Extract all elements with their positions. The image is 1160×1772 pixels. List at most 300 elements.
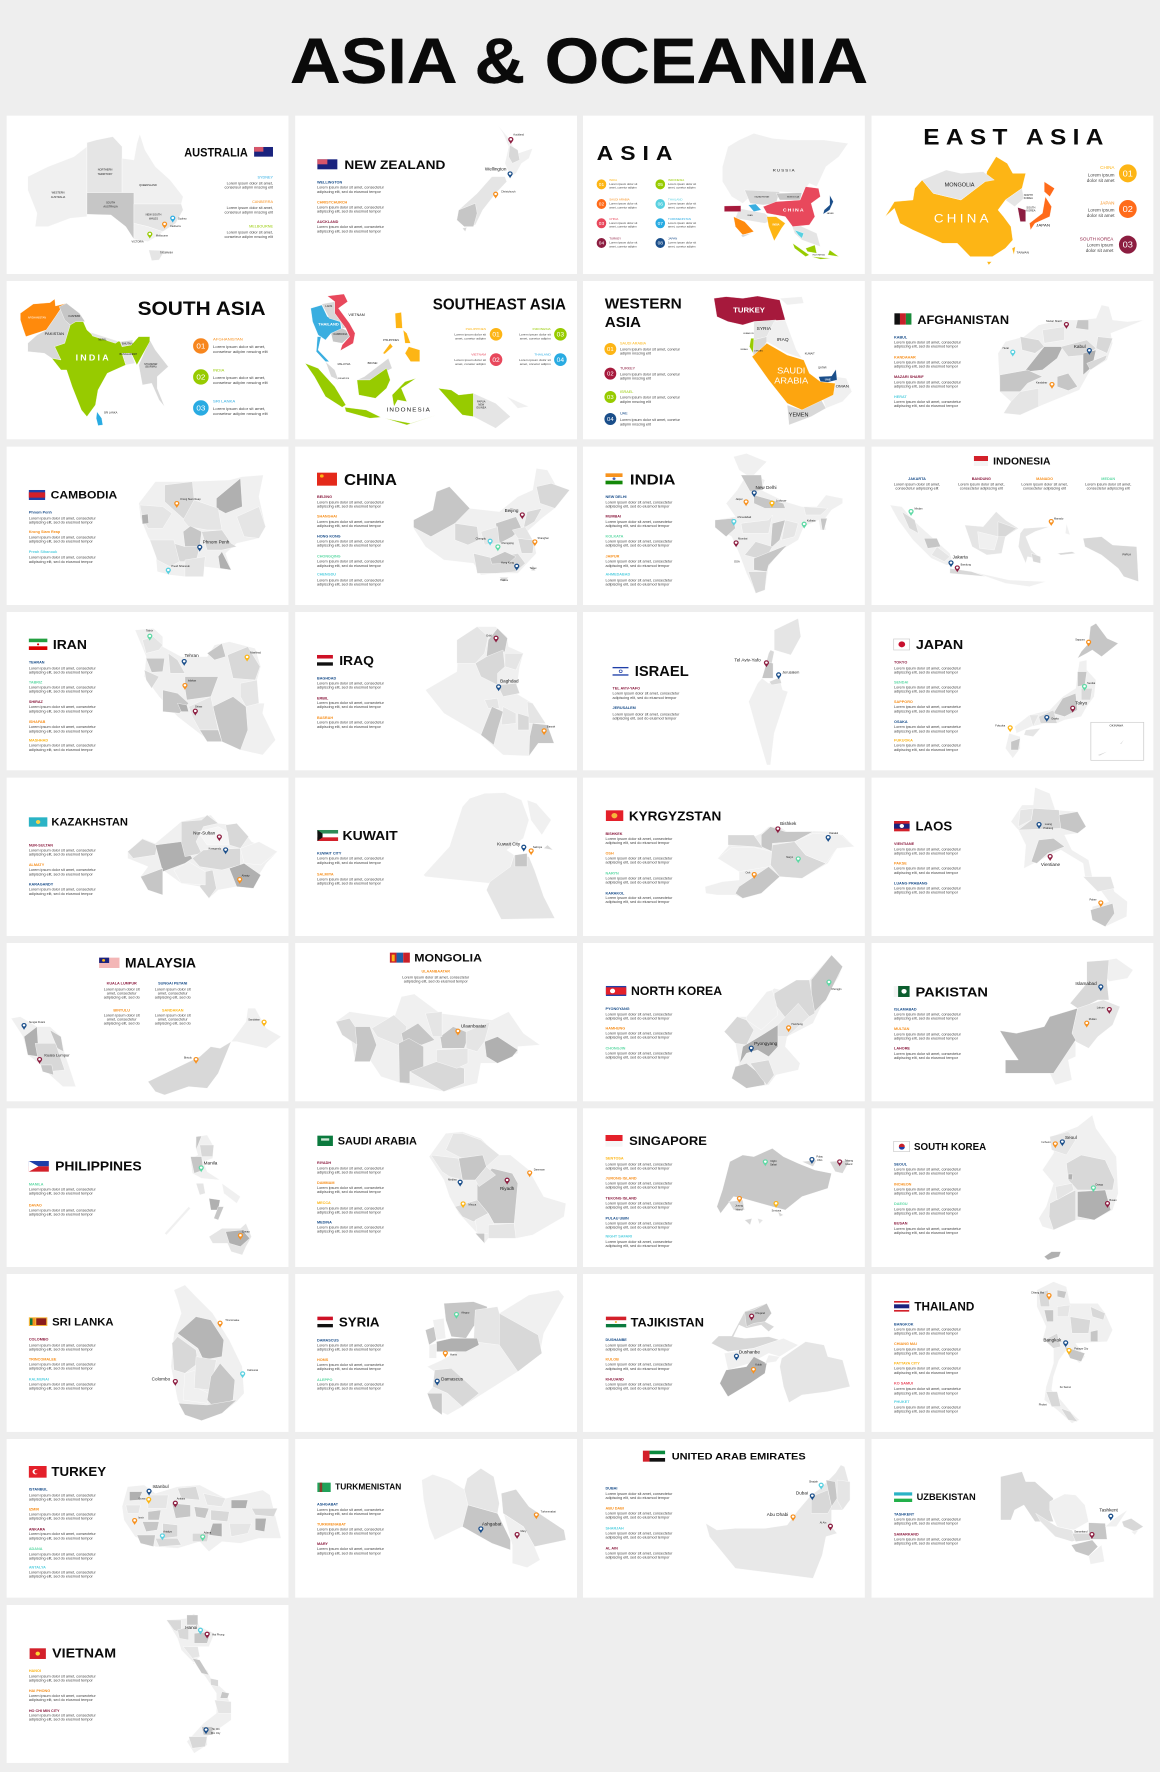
map: Southeast Asia: BRUNEI <box>368 362 378 365</box>
city list: Lorem ipsum dolor sit amet, consectetur <box>317 1206 385 1210</box>
city list: amet, consectetur <box>107 991 137 995</box>
panel: Uzbekistan <box>871 1439 1153 1598</box>
city list: ERBIL <box>317 696 329 700</box>
flag: Tajikistan <box>606 1317 626 1327</box>
map: Kazakhstan <box>128 815 277 898</box>
map: Asia: IRAN <box>748 214 753 217</box>
map: Australia: VICTORIA <box>132 240 144 243</box>
city list: Lorem ipsum dolor sit amet, consectetur <box>894 1537 962 1541</box>
city list: Lorem ipsum dolor sit amet, consectetur <box>317 1383 385 1387</box>
panel: East Asia <box>871 116 1153 274</box>
map: Israel <box>734 618 801 765</box>
numbered list: conseteur adipim nnscing elit <box>213 349 269 354</box>
city list: NEW DELHI <box>606 495 627 499</box>
map: Western Asia: ARABIA <box>774 376 808 385</box>
numbered list: 02 <box>1123 204 1133 214</box>
map: Kyrgyzstan <box>705 821 854 898</box>
heading: United Arab Emirates: UNITED ARAB EMIRATES <box>672 1452 806 1462</box>
city list <box>606 832 673 904</box>
city list: adipiscing elit, sed do eiusmod tempor <box>29 670 94 674</box>
city list: adipiscing elit, sed do eiusmod tempor <box>894 1017 959 1021</box>
map: Turkey: Istanbul <box>152 1484 169 1489</box>
city list: TABRIZ <box>29 680 43 684</box>
numbered list: adipim nnscing elit <box>620 400 651 404</box>
city list: Lorem ipsum dolor sit amet, consectetur <box>894 1207 962 1211</box>
city list: adipiscing elit, sed do eiusmod tempor <box>317 190 382 194</box>
city list: Lorem ipsum dolor sit amet, consectetur <box>606 1012 673 1016</box>
city list: Lorem ipsum dolor sit amet, consectetur <box>606 1512 673 1516</box>
map: Cambodia: Krong Siem Reap <box>180 498 201 501</box>
city list: adipiscing elit, sed do eiusmod tempor <box>29 1497 94 1501</box>
city list: Lorem ipsum dolor sit amet, consectetur <box>606 578 673 582</box>
city list: Lorem ipsum dolor sit amet, consectetur <box>894 341 962 345</box>
numbered list: Lorem ipsum dolor sit <box>609 241 638 245</box>
title: ASIA & OCEANIA <box>290 25 868 97</box>
numbered list: amet, conetur adipim <box>668 244 696 248</box>
flag: Philippines <box>29 1161 49 1172</box>
heading: Malaysia: MALAYSIA <box>125 956 197 971</box>
map: Israel: Jerusalem <box>782 670 799 674</box>
flag: Vietnam <box>30 1648 46 1659</box>
city list: adipiscing elit, sed do eiusmod tempor <box>606 1186 670 1190</box>
numbered list: 01 <box>492 332 500 339</box>
map: Kuwait: Kuwait City <box>497 842 521 847</box>
numbered list: INDIA <box>609 178 617 182</box>
numbered list: amet, conetur adipim <box>668 205 696 209</box>
city list: Lorem ipsum dolor sit amet, consectetur <box>29 556 97 560</box>
city list: adipiscing elit, sed do eiusmod tempor <box>29 729 94 733</box>
city list: JURONG ISLAND <box>606 1177 637 1181</box>
numbered list: 02 <box>599 202 605 207</box>
heading: Tajikistan: TAJIKISTAN <box>631 1315 704 1329</box>
heading: Southeast Asia: SOUTHEAST ASIA <box>433 296 566 313</box>
city list: MAZARI SHARIF <box>894 375 925 379</box>
map: Southeast Asia: PHILIPPINES <box>383 339 399 342</box>
heading: North Korea: NORTH KOREA <box>631 985 722 998</box>
city list: adipiscing elit, sed do eiusmod tempor <box>894 1036 959 1040</box>
city list: adipiscing elit, sed do eiusmod tempor <box>894 851 959 855</box>
numbered list <box>604 342 681 426</box>
map: Turkey: Izmir <box>138 1516 144 1519</box>
city list: Lorem ipsum dolor sit amet, consectetur <box>29 1571 97 1575</box>
city list: DAVAO <box>29 1204 42 1208</box>
city list: consectetur adipiscing elit <box>895 486 939 490</box>
city list: adipiscing elit, sed do eiusmod tempor <box>894 690 959 694</box>
city list: Lorem ipsum dolor sit amet, consectetur <box>613 713 680 717</box>
flag: Kuwait <box>317 830 338 841</box>
numbered list: UAE <box>620 412 628 416</box>
city list: Lorem ipsum dolor sit amet, <box>227 206 273 210</box>
city list: ISLAMABAD <box>894 1007 917 1011</box>
flag: Saudi Arabia <box>317 1136 333 1146</box>
map: Turkmenistan: Mary <box>521 1530 527 1533</box>
city list: Lorem ipsum dolor sit amet, consectetur <box>317 520 385 524</box>
panel: Saudi Arabia <box>295 1108 577 1267</box>
city list: Lorem ipsum dolor sit amet, consectetur <box>29 1343 97 1347</box>
city list: amet, consectetur <box>158 1017 189 1021</box>
map: South Korea: Busan <box>1109 1199 1117 1202</box>
map: Singapore: Safari <box>770 1164 777 1167</box>
city list: adipiscing elit, sed do eiusmod tempor <box>29 748 94 752</box>
city list: adipiscing elit, sed do eiusmod tempor <box>29 1517 94 1521</box>
numbered list: INDONESIA <box>668 178 684 182</box>
numbered list: Lorem ipsum <box>1087 243 1114 248</box>
city list: CHONGQING <box>317 554 341 558</box>
map: North Korea <box>724 955 843 1088</box>
panel: Afghanistan <box>871 281 1153 439</box>
numbered list: Lorem ipsum dolor sit <box>454 358 486 362</box>
city list: Lorem ipsum dolor sit amet, consectetur <box>606 857 673 861</box>
numbered list: 04 <box>607 417 614 423</box>
map: Turkmenistan: Ashgabat <box>482 1522 502 1526</box>
city list: adipiscing elit, sed do eiusmod tempor <box>606 505 670 509</box>
city list: adipiscing elit, sed do eiusmod tempor <box>606 1244 670 1248</box>
city list: SENDAI <box>894 680 908 684</box>
city list: Lorem ipsum dolor sit amet, consectetur <box>606 1383 673 1387</box>
city list: Lorem ipsum dolor sit amet, consectetur <box>894 1032 962 1036</box>
map: India: New Delhi <box>756 485 777 490</box>
city list: adipiscing elit, sed do eiusmod tempor <box>894 345 959 349</box>
heading: East Asia: EAST ASIA <box>923 124 1104 149</box>
city list <box>29 1488 97 1579</box>
city list: TEHRAN <box>29 660 45 664</box>
numbered list: Lorem ipsum dolor sit <box>668 202 696 206</box>
city list: Lorem ipsum dolor sit amet, consectetur <box>606 500 673 504</box>
city list: adipiscing elit, sed do <box>104 1021 140 1025</box>
map: Tajikistan: Khujand <box>755 1312 766 1315</box>
flag: Pakistan <box>894 986 910 997</box>
map: Singapore: Sentosa <box>772 1209 782 1212</box>
map: China: Hong Kong <box>501 562 515 565</box>
city list: KOLKATA <box>606 534 624 538</box>
map: Singapore: Tekong <box>845 1159 854 1162</box>
numbered list: JAPAN <box>1100 201 1115 206</box>
numbered list: amet, conetur adipim <box>455 337 486 341</box>
city list: JAKARTA <box>908 477 926 481</box>
city list: adipiscing elit, sed do eiusmod tempor <box>894 729 959 733</box>
city list: HERAT <box>894 395 908 399</box>
heading: Asia: ASIA <box>597 141 673 165</box>
city list: SYDNEY <box>258 175 274 179</box>
numbered list: Lorem ipsum dolor sit <box>668 182 696 186</box>
numbered list <box>1080 164 1137 254</box>
map: Iraq: Erbil <box>486 635 492 638</box>
city list: AUCKLAND <box>317 220 339 224</box>
numbered list: Lorem ipsum dolor sit <box>454 333 486 337</box>
city list: Phnom Penh <box>29 510 52 514</box>
heading: Kuwait: KUWAIT <box>343 828 398 843</box>
map: Vietnam: Hai Phong <box>212 1633 225 1636</box>
city list: SHIRAZ <box>29 700 44 704</box>
map: Philippines: Manila <box>204 1161 218 1166</box>
map: Western Asia: JORDAN <box>754 350 763 353</box>
city list: Lorem ipsum dolor sit amet, <box>958 482 1005 486</box>
map: Singapore: Jurong <box>735 1205 744 1208</box>
map: Thailand: Pattaya City <box>1074 1347 1089 1350</box>
city list: Lorem ipsum dolor sit amet, consectetur <box>894 1227 962 1231</box>
map: Western Asia: KUWAIT <box>805 352 815 355</box>
map: China <box>414 468 570 582</box>
city list: SUNGAI PETANI <box>158 982 187 986</box>
city list: Lorem ipsum dolor sit amet, consectetur <box>606 837 673 841</box>
numbered list: SAUDI ARABIA <box>620 342 647 346</box>
map: Uzbekistan: Samarkand <box>1074 1531 1088 1534</box>
panel: Asia <box>583 116 865 274</box>
city list: adipiscing elit, sed do eiusmod tempor <box>613 696 677 700</box>
city list: SHARJAH <box>606 1526 624 1530</box>
city list: adipiscing elit, sed do eiusmod tempor <box>317 1387 382 1391</box>
map: Asia: CHINA <box>783 208 805 214</box>
map: South Asia: AFGHANISTAN <box>28 317 46 320</box>
city list: Lorem ipsum dolor sit amet, consectetur <box>606 1363 673 1367</box>
city list: adipiscing elit, sed do eiusmod tempor <box>606 1536 670 1540</box>
city list: Lorem ipsum dolor sit amet, <box>1021 482 1068 486</box>
map: Indonesia: Jakarta <box>953 555 968 560</box>
panel: Philippines <box>7 1108 289 1267</box>
city list: adipiscing elit, sed do eiusmod tempor <box>317 229 382 233</box>
map: East Asia: TAIWAN <box>1017 250 1030 254</box>
city list: KANDAHAR <box>894 355 916 359</box>
map: Thailand: Ko Samui <box>1060 1386 1071 1389</box>
city list: Lorem ipsum dolor sit amet, consectetur <box>606 1532 673 1536</box>
city list: adipiscing elit, sed do eiusmod tempor <box>606 881 670 885</box>
city list <box>894 842 962 895</box>
map: Australia: NORTHERN <box>98 169 113 172</box>
city list: adipiscing elit, sed do eiusmod tempor <box>894 1332 959 1336</box>
map: Western Asia: OMAN <box>836 384 849 388</box>
heading: South Asia: SOUTH ASIA <box>138 299 266 320</box>
city list: Lorem ipsum dolor sit amet, consectetur <box>606 1162 673 1166</box>
panel: Kyrgyzstan <box>583 778 865 936</box>
map: Singapore: Pulau <box>816 1155 824 1158</box>
heading: Kyrgyzstan: KYRGYZSTAN <box>629 809 721 823</box>
city list: adipiscing elit, sed do eiusmod tempor <box>894 871 959 875</box>
heading: Syria: SYRIA <box>339 1314 380 1329</box>
panel: Indonesia <box>871 447 1153 605</box>
city list: DAEGU <box>894 1202 908 1206</box>
map: Singapore: Ubin <box>817 1159 823 1162</box>
city list: ADANA <box>29 1547 43 1551</box>
map: Vietnam: Min City <box>211 1732 221 1735</box>
panel: Southeast Asia <box>295 281 577 439</box>
city list: adipiscing elit, sed do eiusmod tempor <box>29 892 94 896</box>
map: Singapore: Night <box>770 1160 777 1163</box>
map: South Asia: BHUTAN <box>122 342 133 345</box>
city list: adipiscing elit, sed do eiusmod tempor <box>29 1678 94 1682</box>
map: Asia: KAZAKHSTAN <box>755 195 770 198</box>
city list: Lorem ipsum dolor sit amet, consectetur <box>606 1051 673 1055</box>
city list: Lorem ipsum dolor sit amet, <box>227 181 273 185</box>
city list: Lorem ipsum dolor sit amet, consectetur <box>317 1363 385 1367</box>
city list: adipiscing elit, sed do eiusmod tempor <box>29 560 94 564</box>
panel: India <box>583 447 865 605</box>
city list: FUKUOKA <box>894 738 913 742</box>
panel: Israel <box>583 612 865 770</box>
map: Southeast Asia: NEW <box>478 404 485 407</box>
flag: India <box>606 473 623 484</box>
map: United Arab Emirates: Abu Dhabi <box>767 1512 788 1517</box>
city list: BAGHDAD <box>317 677 337 681</box>
city list: Lorem ipsum dolor sit amet, consectetur <box>29 666 97 670</box>
city list: Lorem ipsum dolor sit amet, consectetur <box>29 1674 97 1678</box>
panel: Tajikistan <box>583 1274 865 1432</box>
city list: Lorem ipsum dolor sit amet, consectetur <box>317 1343 385 1347</box>
city list: DUBAI <box>606 1487 617 1491</box>
city list: LAHORE <box>894 1047 911 1051</box>
city list: adipiscing elit, sed do eiusmod tempor <box>606 564 670 568</box>
numbered list: adipim nnscing elit <box>620 422 651 426</box>
city list: Lorem ipsum dolor sit amet, consectetur <box>317 877 385 881</box>
numbered list: SRI LANKA <box>213 399 236 404</box>
flag: Israel <box>613 666 628 677</box>
city list: Lorem ipsum dolor sit amet, consectetur <box>29 1532 97 1536</box>
city list: MANADO <box>1036 477 1053 481</box>
heading: Uzbekistan: UZBEKISTAN <box>917 1492 976 1503</box>
map: Singapore: Island <box>736 1208 743 1211</box>
numbered list: 02 <box>492 357 500 364</box>
city list: Lorem ipsum dolor sit amet, consectetur <box>606 1182 673 1186</box>
city list: adipiscing elit, sed do eiusmod tempor <box>317 725 382 729</box>
city list: adipiscing elit, sed do eiusmod tempor <box>606 1347 670 1351</box>
heading: Vietnam: VIETNAM <box>52 1645 116 1660</box>
numbered list: Lorem ipsum dolor sit amet, <box>213 375 265 380</box>
city list: Lorem ipsum dolor sit amet, consectetur <box>606 896 673 900</box>
map: Western Asia: IRAQ <box>777 337 789 342</box>
numbered list: 01 <box>607 347 614 353</box>
numbered list: THAILAND <box>668 198 683 202</box>
map: Thailand: Bangkok <box>1043 1338 1062 1343</box>
numbered list: amet, conetur adipim <box>455 362 486 366</box>
city list: COLOMBO <box>29 1338 49 1342</box>
city list: adipiscing elit, sed do <box>104 995 140 999</box>
numbered list: ISRAEL <box>620 390 633 394</box>
map: Tajikistan: Dushanbe <box>739 1350 761 1354</box>
map: Mongolia: Ulaanbaatar <box>461 1024 487 1028</box>
map: Indonesia: Manado <box>1054 517 1064 520</box>
city list: Lorem ipsum dolor sit amet, <box>227 231 273 235</box>
flag: China <box>317 473 337 486</box>
numbered list: adipim nnscing elit <box>620 377 651 381</box>
city list: Lorem ipsum dolor sit amet, consectetur <box>29 1513 97 1517</box>
panel: Kuwait <box>295 778 577 936</box>
panel: Iraq <box>295 612 577 770</box>
map: Afghanistan: Mazari Sharif <box>1046 320 1062 323</box>
numbered list: Lorem ipsum dolor sit <box>519 358 551 362</box>
map: Japan: Sendai <box>1087 682 1096 685</box>
city list: adipiscing elit, sed do <box>155 1021 191 1025</box>
city list: Lorem ipsum dolor sit amet, consectetur <box>606 540 673 544</box>
city list: Lorem ipsum dolor sit amet, <box>894 482 940 486</box>
city list: Lorem ipsum dolor sit amet, consectetur <box>894 380 962 384</box>
city list: Lorem ipsum dolor sit amet, consectetur <box>894 867 962 871</box>
map: Asia: MONGOLIA <box>787 195 800 198</box>
map: New Zealand: Christchurch <box>501 191 516 194</box>
map: Turkey: Adana <box>204 1531 212 1534</box>
city list: adipiscing elit, sed do eiusmod tempor <box>606 1036 670 1040</box>
heading: Thailand: THAILAND <box>914 1300 974 1313</box>
flag: Iran <box>29 639 47 650</box>
map: India: Mumbai <box>738 537 748 540</box>
map: Western Asia: SAUDI <box>777 366 805 375</box>
numbered list: 04 <box>557 357 565 364</box>
city list: adipiscing elit, sed do eiusmod tempor <box>317 882 382 886</box>
city list: Lorem ipsum dolor sit amet, consectetur <box>894 1187 962 1191</box>
numbered list: 02 <box>196 373 205 382</box>
map: Southeast Asia: PAPUA <box>477 401 486 404</box>
city list <box>606 1007 673 1059</box>
city list: adipiscing elit, sed do eiusmod tempor <box>29 1556 94 1560</box>
city list: adipiscing elit, sed do eiusmod tempor <box>606 1016 670 1020</box>
map: Iraq <box>425 627 556 756</box>
heading: Singapore: SINGAPORE <box>629 1134 707 1148</box>
city list: adipiscing elit, sed do eiusmod tempor <box>29 853 94 857</box>
panel: Thailand <box>871 1274 1153 1432</box>
city list <box>606 495 673 587</box>
numbered list: Lorem ipsum dolor sit <box>609 202 638 206</box>
city list: adipiscing elit, sed do eiusmod tempor <box>606 1555 670 1559</box>
city list: Lorem ipsum dolor sit amet, consectetur <box>894 1387 962 1391</box>
city list: consectetur adipiscing elit <box>1023 486 1066 490</box>
map: Asia <box>722 133 848 259</box>
city list: CHIANG MAI <box>894 1342 917 1346</box>
flag: North Korea <box>606 986 626 996</box>
map: North Korea: Hamhung <box>792 1023 803 1026</box>
city list: adipiscing elit, sed do eiusmod tempor <box>29 1213 94 1217</box>
map: Australia: AUSTRALIA <box>103 205 118 208</box>
city list: TURKMENABAT <box>317 1522 347 1526</box>
city list: Lorem ipsum dolor sit amet, consectetur <box>317 1508 385 1512</box>
city list: Lorem ipsum dolor sit amet, consectetur <box>606 877 673 881</box>
city list: adipiscing elit, sed do eiusmod tempor <box>894 1351 959 1355</box>
city list: PULAU UBIN <box>606 1216 629 1220</box>
city list: adipiscing elit, sed do eiusmod tempor <box>606 861 670 865</box>
map: Australia: Melbourne <box>156 234 169 237</box>
numbered list: 07 <box>658 221 663 226</box>
heading: Western Asia <box>605 296 682 331</box>
numbered list: Lorem ipsum dolor sit <box>609 182 638 186</box>
numbered list: 03 <box>196 404 205 413</box>
heading: South Korea: SOUTH KOREA <box>914 1141 986 1153</box>
numbered list: amet, conetur adipim <box>520 337 551 341</box>
city list <box>894 1513 962 1545</box>
map: Australia: NEW SOUTH <box>146 213 162 216</box>
city list: CHENGDU <box>317 573 336 577</box>
map: Vietnam <box>166 1613 231 1753</box>
map: Philippines: Davao <box>242 1230 250 1233</box>
city list: Lorem ipsum dolor sit amet, consectetur <box>317 225 385 229</box>
map: Laos: Pakse <box>1089 899 1097 902</box>
map: China: Beijing <box>505 508 519 513</box>
city list: adipiscing elit, sed do eiusmod tempor <box>606 841 670 845</box>
map: Afghanistan: Kabul <box>1074 344 1086 349</box>
map: Southeast Asia: MALAYSIA <box>338 363 351 366</box>
city list: adipiscing elit, sed do eiusmod tempor <box>606 1496 670 1500</box>
map: Australia: WALES <box>149 217 158 220</box>
map: Iran: Tabriz <box>146 630 154 633</box>
numbered list: amet, conetur adipim <box>520 362 551 366</box>
panel: Syria <box>295 1274 577 1432</box>
heading: Mongolia: MONGOLIA <box>414 951 482 964</box>
map: Western Asia <box>714 296 852 425</box>
heading: Pakistan: PAKISTAN <box>915 985 988 999</box>
flag: Turkey <box>29 1466 47 1478</box>
city list <box>894 477 1131 490</box>
numbered list: TURKEY <box>609 237 621 241</box>
city list: adipiscing elit, sed do eiusmod tempor <box>606 544 670 548</box>
map: India: Lucknow <box>776 499 787 502</box>
heading: Cambodia: CAMBODIA <box>51 489 118 501</box>
city list: Lorem ipsum dolor sit amet, consectetur <box>29 1694 97 1698</box>
